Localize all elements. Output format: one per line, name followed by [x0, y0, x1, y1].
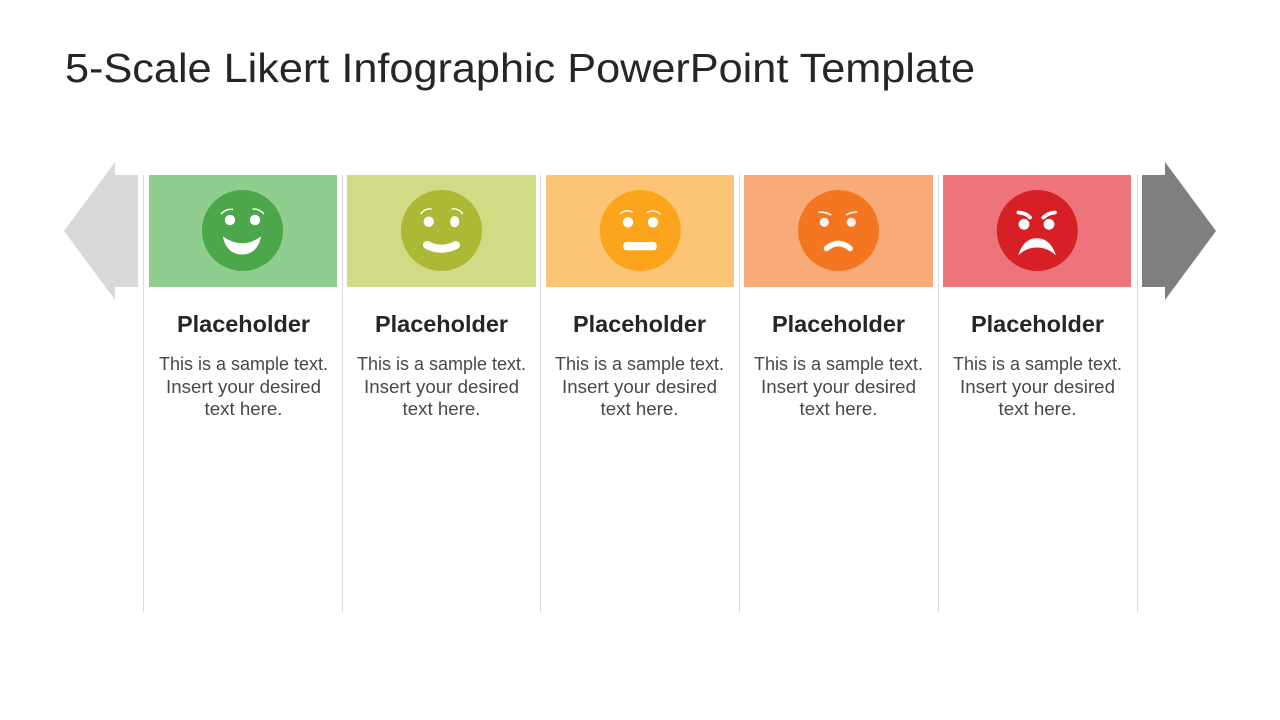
panel: dissatisfied: [744, 175, 933, 419]
body text: Insert your desired: [166, 377, 321, 397]
heading: Placeholder: [971, 311, 1104, 337]
body text: text here.: [402, 399, 480, 419]
body text: Insert your desired: [960, 377, 1115, 397]
panel: very satisfied: [149, 175, 337, 419]
body text: This is a sample text.: [754, 354, 923, 374]
icon: unhappy face: [798, 190, 879, 271]
icon: happy face: [401, 190, 482, 271]
body text: text here.: [800, 399, 878, 419]
color band: [943, 175, 1131, 287]
title: 5-Scale Likert Infographic PowerPoint Template: [65, 45, 975, 91]
body text: This is a sample text.: [159, 354, 328, 374]
color band: [546, 175, 734, 287]
heading: Placeholder: [772, 311, 905, 337]
color band: [347, 175, 536, 287]
body text: text here.: [204, 399, 282, 419]
body text: This is a sample text.: [953, 354, 1122, 374]
icon: very happy face: [202, 190, 283, 271]
heading: Placeholder: [177, 311, 310, 337]
body text: [159, 354, 328, 419]
icon: angry face: [997, 190, 1078, 271]
body text: text here.: [600, 399, 678, 419]
body text: [953, 354, 1122, 419]
body text: [754, 354, 923, 419]
panel: satisfied: [347, 175, 536, 419]
arrow: right: [1142, 162, 1216, 300]
heading: Placeholder: [375, 311, 508, 337]
body text: [555, 354, 724, 419]
body text: text here.: [998, 399, 1076, 419]
arrow: left: [64, 162, 138, 300]
color band: [744, 175, 933, 287]
panel: very dissatisfied: [943, 175, 1131, 419]
color band: [149, 175, 337, 287]
heading: Placeholder: [573, 311, 706, 337]
body text: [357, 354, 526, 419]
icon: neutral face: [600, 190, 681, 271]
body text: Insert your desired: [364, 377, 519, 397]
body text: This is a sample text.: [555, 354, 724, 374]
body text: Insert your desired: [562, 377, 717, 397]
panel: neutral: [546, 175, 734, 419]
body text: Insert your desired: [761, 377, 916, 397]
body text: This is a sample text.: [357, 354, 526, 374]
